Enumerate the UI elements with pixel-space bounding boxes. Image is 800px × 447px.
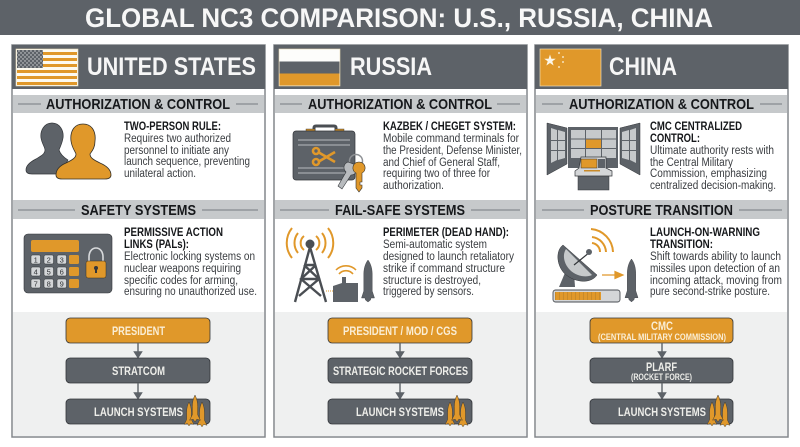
section heading: fail-safe systems <box>275 200 526 219</box>
box: PLARF: (ROCKET FORCE) <box>631 372 692 382</box>
text: two-person rule <box>124 121 250 180</box>
icon: keypad and padlock: 2 <box>47 256 51 264</box>
box: President <box>66 318 210 343</box>
icon: keypad and padlock: 7 <box>34 280 38 288</box>
section heading: safety systems <box>13 200 264 219</box>
text: Perimeter (Dead Hand): designed to launch retaliatory <box>383 251 514 263</box>
text: CMC centralized control: Commission, emphasizing <box>650 168 767 180</box>
panel: China <box>535 45 788 437</box>
text: launch-on-warning transition: incoming attack, moving from <box>650 275 782 287</box>
icon: briefcase and keys <box>293 126 365 192</box>
country name: United States: UNITED STATES <box>87 53 256 81</box>
icon: keypad and padlock: 5 <box>47 268 51 276</box>
text: Kazbek / Cheget system: and Chief of General Staff, <box>383 157 500 169</box>
box: launch systems: LAUNCH SYSTEMS <box>94 405 183 419</box>
icon: command centre with screens and console <box>547 123 640 190</box>
text: Kazbek / Cheget system <box>383 121 522 192</box>
text: permissive action links: specific codes for arming, <box>124 275 238 287</box>
section heading: authorization and control: AUTHORIZATION & CONTROL <box>569 96 754 113</box>
text: permissive action links: ensuring no unauthorized use. <box>124 286 257 298</box>
flowchart: US command chain <box>13 312 264 436</box>
text: permissive action links: LINKS (PALs): <box>124 239 189 251</box>
text: two-person rule: TWO-PERSON RULE: <box>124 121 221 133</box>
text: Perimeter (Dead Hand) <box>383 227 514 298</box>
arrow: STRATCOM to launch systems <box>134 383 142 398</box>
text: permissive action links <box>124 227 257 298</box>
box: President: PRESIDENT <box>112 324 166 338</box>
icon: keypad and padlock: 9 <box>60 280 64 288</box>
title banner: GLOBAL NC3 COMPARISON: U.S., RUSSIA, CHINA <box>85 3 713 33</box>
box: President / MOD / CGS: PRESIDENT / MOD / CGS <box>343 324 457 338</box>
text: CMC centralized control <box>650 121 776 192</box>
section heading: fail-safe systems: FAIL-SAFE SYSTEMS <box>335 202 465 219</box>
text: Kazbek / Cheget system: KAZBEK / CHEGET SYSTEM: <box>383 121 516 133</box>
icon: satellite dish, progress bar and missile <box>553 229 638 302</box>
country name: China: CHINA <box>609 53 677 81</box>
text: launch-on-warning transition: LAUNCH-ON-WARNING <box>650 227 760 239</box>
text: two-person rule: personnel to initiate any <box>124 145 229 157</box>
text: CMC centralized control: the Central Military <box>650 157 733 169</box>
box: Strategic Rocket Forces <box>328 358 472 383</box>
section heading: posture transition: POSTURE TRANSITION <box>590 202 733 219</box>
title banner <box>0 0 800 35</box>
text: two-person rule: launch sequence, preventing <box>124 156 250 168</box>
icon: China flag <box>540 49 601 86</box>
text: Perimeter (Dead Hand): strike if command structure <box>383 263 505 275</box>
box: PLARF <box>590 358 733 383</box>
panel: United States <box>12 45 265 437</box>
text: permissive action links: nuclear weapons requiring <box>124 263 241 275</box>
country name: Russia: RUSSIA <box>350 53 432 81</box>
icon: radio tower, bunker and missile <box>287 228 374 302</box>
box: launch systems <box>66 395 210 427</box>
text: CMC centralized control: CMC CENTRALIZED <box>650 121 742 133</box>
box: PLARF: PLARF <box>646 360 677 374</box>
arrow: President to STRATCOM <box>134 343 142 358</box>
text: Kazbek / Cheget system: requiring two of three for <box>383 168 490 180</box>
text: Kazbek / Cheget system: authorization. <box>383 180 444 192</box>
text: launch-on-warning transition: TRANSITION: <box>650 239 713 251</box>
text: Kazbek / Cheget system: the President, Defense Minister, <box>383 145 522 157</box>
box: Strategic Rocket Forces: STRATEGIC ROCKET FORCES <box>333 364 468 378</box>
arrow: rocket forces to launch systems <box>396 383 404 398</box>
text: launch-on-warning transition: missiles upon detection of an <box>650 263 780 275</box>
text: Kazbek / Cheget system: Mobile command terminals for <box>383 133 519 145</box>
box: launch systems <box>590 395 733 427</box>
text: CMC centralized control: centralized decision-making. <box>650 180 776 192</box>
text: CMC centralized control: Ultimate authority rests with <box>650 145 774 157</box>
section heading: safety systems: SAFETY SYSTEMS <box>81 202 196 219</box>
text: Perimeter (Dead Hand): structure is destroyed, <box>383 275 481 287</box>
box: STRATCOM: STRATCOM <box>112 364 165 378</box>
icon: Russia flag <box>279 49 340 86</box>
box: CMC <box>590 318 733 343</box>
box: launch systems: LAUNCH SYSTEMS <box>618 405 706 419</box>
text: Perimeter (Dead Hand): PERIMETER (DEAD HAND): <box>383 227 509 239</box>
icon: keypad and padlock: 8 <box>47 280 51 288</box>
icon: keypad and padlock: 3 <box>60 256 64 264</box>
flowchart: China command chain <box>536 312 787 436</box>
icon: keypad and padlock: 1 <box>34 256 38 264</box>
text: two-person rule: Requires two authorized <box>124 133 231 145</box>
text: two-person rule: unilateral action. <box>124 168 196 180</box>
text: permissive action links: PERMISSIVE ACTION <box>124 227 223 239</box>
text: launch-on-warning transition <box>650 227 782 298</box>
text: Perimeter (Dead Hand): Semi-automatic system <box>383 239 487 251</box>
box: launch systems <box>328 395 472 427</box>
text: CMC centralized control: CONTROL: <box>650 133 700 145</box>
box: STRATCOM <box>66 358 210 383</box>
icon: keypad and padlock <box>24 234 112 293</box>
section heading: posture transition <box>536 200 787 219</box>
icon: US flag <box>16 49 78 86</box>
panel: Russia <box>274 45 527 437</box>
text: launch-on-warning transition: Shift towards ability to launch <box>650 251 781 263</box>
text: launch-on-warning transition: pure second-strike posture. <box>650 286 770 298</box>
box: launch systems: LAUNCH SYSTEMS <box>356 405 444 419</box>
arrow: leadership to rocket forces <box>396 343 404 358</box>
flowchart: Russia command chain <box>275 312 526 436</box>
text: permissive action links: Electronic locking systems on <box>124 251 255 263</box>
section heading: authorization and control: AUTHORIZATION & CONTROL <box>308 96 492 113</box>
section heading: authorization and control: AUTHORIZATION & CONTROL <box>46 96 230 113</box>
box: CMC: (CENTRAL MILITARY COMMISSION) <box>598 332 726 343</box>
box: President / MOD / CGS <box>328 318 472 343</box>
arrow: CMC to PLARF <box>658 343 666 358</box>
icon: keypad and padlock: 6 <box>60 268 64 276</box>
icon: two people <box>26 123 111 179</box>
arrow: PLARF to launch systems <box>658 383 666 398</box>
icon: keypad and padlock: 4 <box>34 268 38 276</box>
text: Perimeter (Dead Hand): triggered by sensors. <box>383 286 474 298</box>
box: CMC: CMC <box>651 319 673 333</box>
